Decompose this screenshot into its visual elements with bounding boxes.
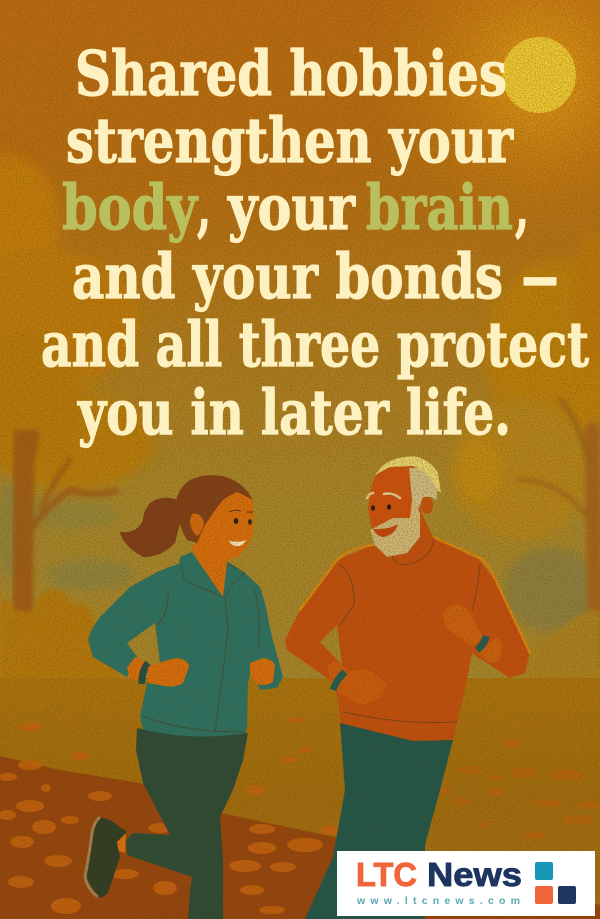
man ear (421, 496, 433, 514)
headline line 3: , (515, 171, 529, 244)
grey hair (409, 468, 437, 513)
fallen leaves (0, 717, 339, 914)
headline line 3: body (62, 171, 199, 244)
right hand (250, 658, 275, 685)
neck (385, 510, 433, 565)
background autumn trees (0, 155, 600, 682)
logo: LTC News (337, 851, 595, 916)
woman runner (85, 475, 283, 919)
jacket seams (143, 560, 259, 732)
hair (175, 475, 253, 543)
pants (126, 728, 248, 919)
eyes and brows (367, 493, 400, 511)
sock (114, 834, 126, 853)
left wrist band (142, 663, 148, 684)
left bushes (0, 590, 125, 680)
logo url: www.ltcnews.com (356, 895, 520, 907)
man forearm (478, 637, 502, 663)
left tree trunk (22, 430, 118, 680)
gap between arm and body (320, 625, 342, 665)
shoe sole (85, 817, 100, 897)
ponytail (120, 498, 180, 557)
ear front (190, 514, 204, 536)
left hand (148, 658, 189, 687)
man pants (305, 723, 453, 919)
sweater seams (340, 565, 480, 723)
man lower hand (327, 662, 387, 705)
face (190, 490, 254, 559)
man lower wrist band (333, 672, 345, 690)
sweater (285, 537, 530, 741)
logo squares (535, 862, 576, 904)
headline line 3: your (227, 171, 356, 244)
right bush (525, 610, 600, 682)
man face (368, 462, 422, 530)
man runner (285, 456, 530, 919)
eyes and smile (229, 510, 253, 546)
ground (0, 678, 600, 919)
right tree trunk and branches (520, 400, 596, 660)
mouth (373, 524, 398, 537)
reddish path (0, 756, 600, 919)
left wrist (127, 657, 147, 682)
man upper hand (443, 604, 483, 647)
logo wordmark LTC: LTC (356, 856, 417, 893)
man upper wrist band (477, 636, 486, 650)
sun glow (300, 0, 600, 300)
sweater highlight (300, 537, 530, 653)
left tree foliage (0, 155, 155, 591)
right tree foliage (450, 230, 600, 632)
headline line 1: Shared hobbies (75, 37, 507, 110)
neck and chest (192, 545, 235, 597)
shoe (85, 817, 127, 898)
headline line 4: – (520, 240, 560, 313)
headline line 3: brain (366, 171, 513, 244)
beard (370, 500, 420, 557)
headline line 3: , (197, 171, 211, 244)
headline line 3 (62, 171, 529, 244)
sun (502, 37, 576, 113)
jacket (88, 552, 283, 742)
hair highlight (375, 456, 441, 493)
logo panel (337, 851, 595, 916)
headline line 4: and your bonds (72, 240, 503, 313)
logo wordmark News: News (427, 856, 522, 893)
headline (41, 37, 589, 449)
